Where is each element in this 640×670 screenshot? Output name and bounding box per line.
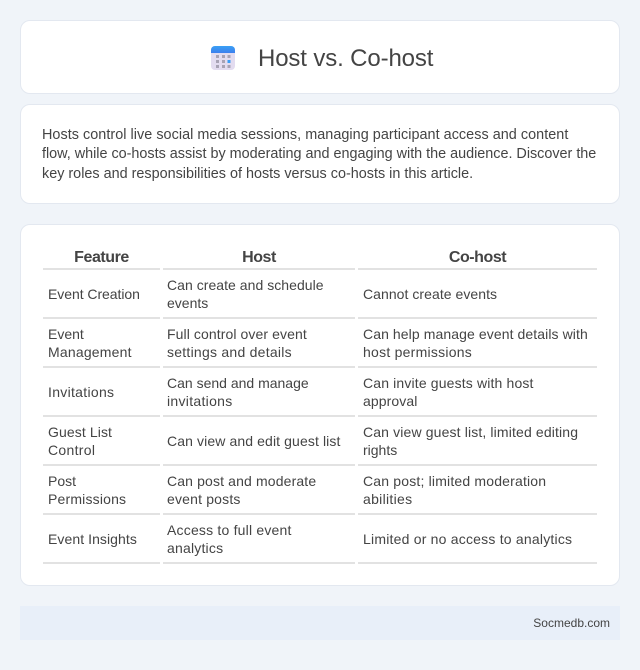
row: guest list control: rights [363,442,397,458]
intro text: flow, while co-hosts assist by moderating and engaging with the audience. Discover the [42,146,596,162]
row: invitations [48,375,534,409]
row: post permissions: Can post; limited moderation [363,473,546,489]
table header: Host [242,249,276,266]
heading: Host vs. Co-host [258,45,433,72]
row: event management: settings and details [167,344,292,360]
row: event management [48,326,588,360]
row: event insights: Limited or no access to analytics [363,531,572,547]
footer bar [20,606,620,640]
row: invitations: Can invite guests with host [363,375,534,391]
row: event management: host permissions [363,344,472,360]
row: event insights [48,522,572,556]
row: event management: Can help manage event details with [363,326,588,342]
row: event creation: events [167,295,208,311]
row: guest list control: Guest List [48,424,112,440]
row: post permissions: event posts [167,491,241,507]
row: post permissions: Permissions [48,491,126,507]
intro text [42,127,596,182]
table header: Co-host [449,249,506,266]
row: event creation: Cannot create events [363,286,497,302]
title panel [20,20,620,94]
row: event creation [48,277,497,311]
row: invitations: invitations [167,393,233,409]
table header: Feature [74,249,129,266]
row: guest list control [48,424,578,458]
row: invitations: Invitations [48,384,114,400]
row: post permissions: Post [48,473,76,489]
row: event insights: Event Insights [48,531,137,547]
row: event creation: Event Creation [48,286,140,302]
row: post permissions: abilities [363,491,412,507]
icon: calendar [211,46,235,70]
row: event insights: Access to full event [167,522,292,538]
footer text: Socmedb.com [533,616,610,630]
intro panel [20,104,620,204]
row: event management: Management [48,344,132,360]
row: event management: Full control over event [167,326,307,342]
row: event creation: Can create and schedule [167,277,324,293]
row: guest list control: Can view guest list, limited editing [363,424,578,440]
row: guest list control: Control [48,442,95,458]
intro text: Hosts control live social media sessions, managing participant access and content [42,127,568,143]
table header [74,249,506,266]
row: post permissions: Can post and moderate [167,473,316,489]
row: event insights: analytics [167,540,223,556]
intro text: key roles and responsibilities of hosts versus co-hosts in this article. [42,166,473,182]
row: invitations: Can send and manage [167,375,309,391]
row: event management: Event [48,326,84,342]
row: guest list control: Can view and edit guest list [167,433,341,449]
row: invitations: approval [363,393,418,409]
row: post permissions [48,473,546,507]
table panel [20,224,620,586]
